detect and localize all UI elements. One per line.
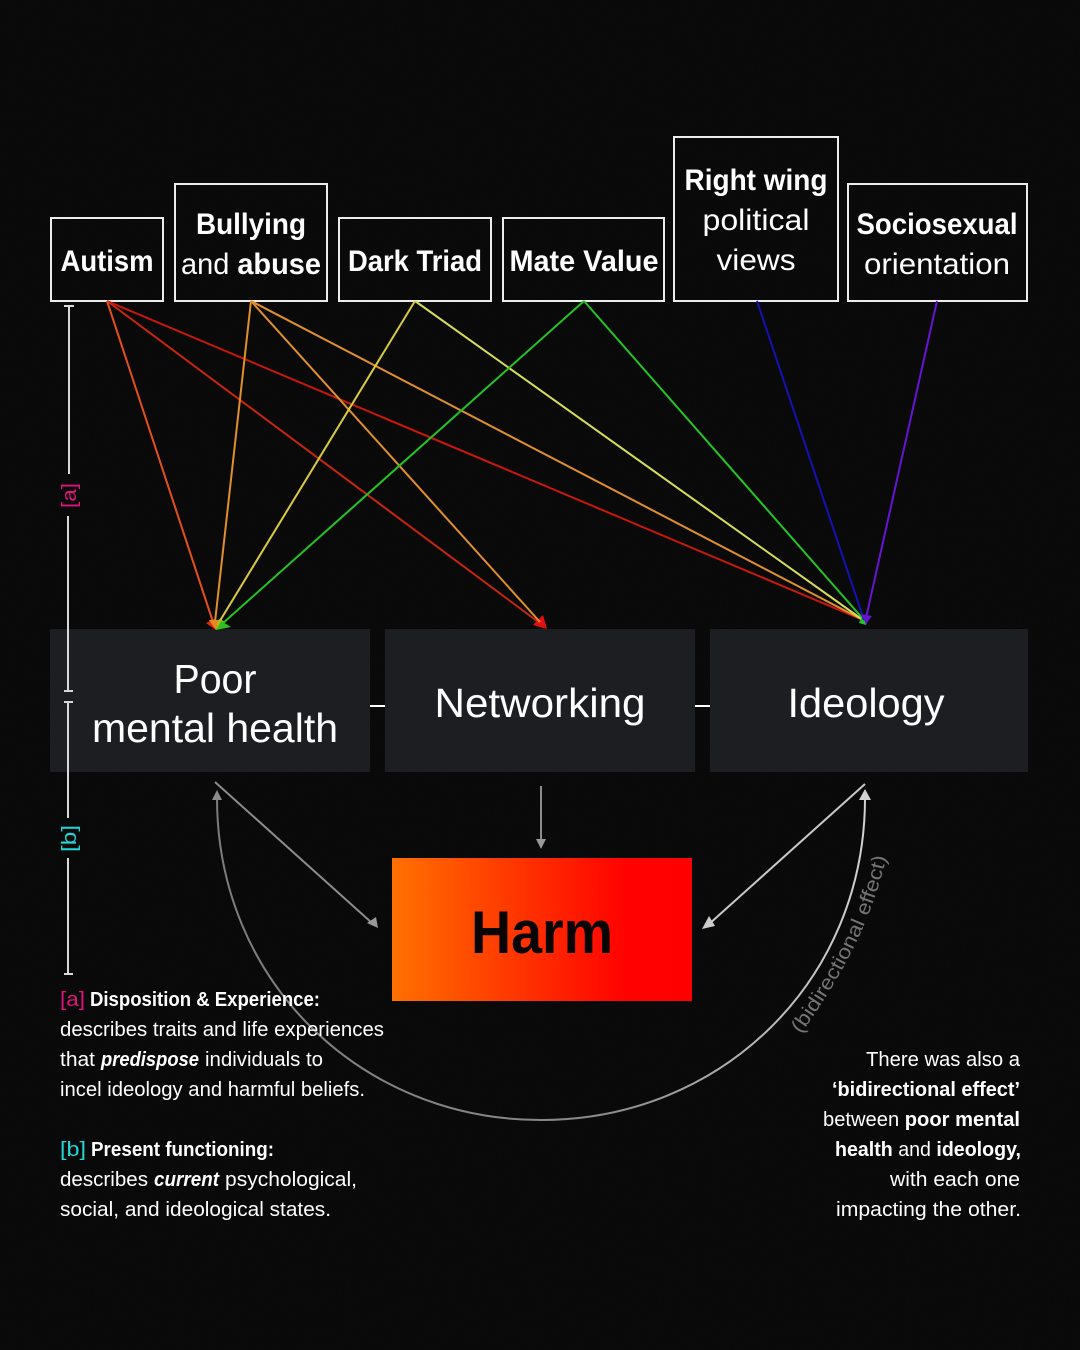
arrow: Ideology to Harm — [702, 784, 865, 929]
label: Poor mental health: Poor — [174, 656, 256, 702]
arrows: factors to outcomes — [107, 301, 937, 630]
text block: bidirectional note — [823, 1049, 1021, 1221]
text block: bidirectional note: between poor mental — [823, 1109, 1020, 1131]
arrow: Autism to Networking — [107, 301, 547, 629]
label: Bullying and abuse: Bullying — [196, 208, 306, 241]
arrow: Dark Triad to Poor mental health — [216, 301, 415, 630]
label: Sociosexual orientation — [856, 208, 1018, 281]
box: Dark Triad — [339, 218, 491, 301]
definition b: [b] — [60, 1139, 86, 1161]
label: Right wing political views — [684, 164, 828, 277]
connector ticks between outcome boxes — [370, 705, 710, 707]
definition a: that — [60, 1049, 95, 1071]
definition a — [60, 989, 384, 1101]
label: Right wing political views: views — [716, 244, 796, 277]
arc: bidirectional effect — [212, 789, 871, 1120]
definition b: social, and ideological states. — [60, 1199, 331, 1221]
box: Networking — [385, 629, 695, 772]
text block: bidirectional note: There was also a — [866, 1049, 1021, 1071]
label: Sociosexual orientation: orientation — [864, 248, 1010, 281]
arrow: Bullying to Ideology — [251, 301, 863, 620]
text block: definitions — [60, 989, 384, 1221]
box: Bullying and abuse — [175, 184, 327, 301]
definition a: [a] — [60, 989, 85, 1011]
bracket: b — [64, 702, 73, 974]
box: Ideology — [710, 629, 1028, 772]
definition b: describes — [60, 1169, 148, 1191]
arrow: Sociosexual to Ideology — [861, 301, 937, 624]
arrow: Mate Value to Poor mental health — [216, 301, 584, 630]
arrow: Bullying to Poor mental health — [209, 301, 251, 630]
label: Networking: Networking — [434, 680, 646, 726]
bar: Harm — [392, 858, 692, 1001]
label: Bullying and abuse — [181, 208, 321, 281]
label: [a]: [a] — [59, 483, 81, 508]
arrow: Autism to Ideology — [107, 301, 863, 620]
arrow: Autism to Poor mental health — [107, 301, 216, 630]
box: Poor mental health — [50, 629, 370, 772]
definition a: Disposition & Experience: — [90, 989, 320, 1011]
outcome labels — [92, 656, 945, 751]
label: Mate Value: Mate Value — [510, 245, 658, 278]
label: bidirectional effect: (bidirectional effect) — [792, 856, 890, 1032]
definition b: psychological, — [225, 1169, 357, 1191]
panel: factor boxes — [51, 137, 1027, 301]
text block: bidirectional note: health and ideology, — [835, 1139, 1021, 1161]
label: Poor mental health: mental health — [92, 705, 338, 751]
text block: bidirectional note: impacting the other. — [836, 1199, 1021, 1221]
box: Autism — [51, 218, 163, 301]
arrow: Bullying to Networking — [251, 301, 540, 622]
label: Ideology: Ideology — [788, 680, 945, 726]
box: Right wing political views — [674, 137, 838, 301]
box: Sociosexual orientation — [848, 184, 1027, 301]
panel: outcome boxes — [50, 629, 1028, 772]
definition a: incel ideology and harmful beliefs. — [60, 1079, 365, 1101]
arrow: Networking to Harm — [536, 786, 546, 849]
definition a: individuals to — [205, 1049, 323, 1071]
factor box labels — [60, 164, 1018, 281]
text block: bidirectional note: ‘bidirectional effect’ — [832, 1079, 1020, 1101]
definition a: predispose — [100, 1049, 199, 1071]
label: Sociosexual orientation: Sociosexual — [856, 208, 1018, 241]
arrow: Dark Triad to Ideology — [415, 301, 863, 620]
bar: Harm: Harm — [471, 899, 613, 966]
arrow: Right wing to Ideology — [757, 301, 869, 625]
definition a: describes traits and life experiences — [60, 1019, 384, 1041]
arrow: Mate Value to Ideology — [584, 301, 866, 625]
label: Dark Triad: Dark Triad — [348, 245, 482, 278]
arrow: Poor mental health to Harm — [215, 782, 378, 928]
label: Bullying and abuse: and abuse — [181, 248, 321, 281]
text block: bidirectional note: with each one — [889, 1169, 1020, 1191]
label: Right wing political views: political — [702, 204, 810, 237]
definition b: Present functioning: — [91, 1139, 274, 1161]
definition b: current — [154, 1169, 220, 1191]
label: Right wing political views: Right wing — [684, 164, 828, 197]
label: [b]: [b] — [59, 825, 81, 852]
bracket: a — [64, 306, 74, 691]
label: Poor mental health — [92, 656, 338, 751]
box: Mate Value — [503, 218, 664, 301]
label: Autism: Autism — [60, 245, 154, 278]
definition b — [60, 1139, 357, 1221]
